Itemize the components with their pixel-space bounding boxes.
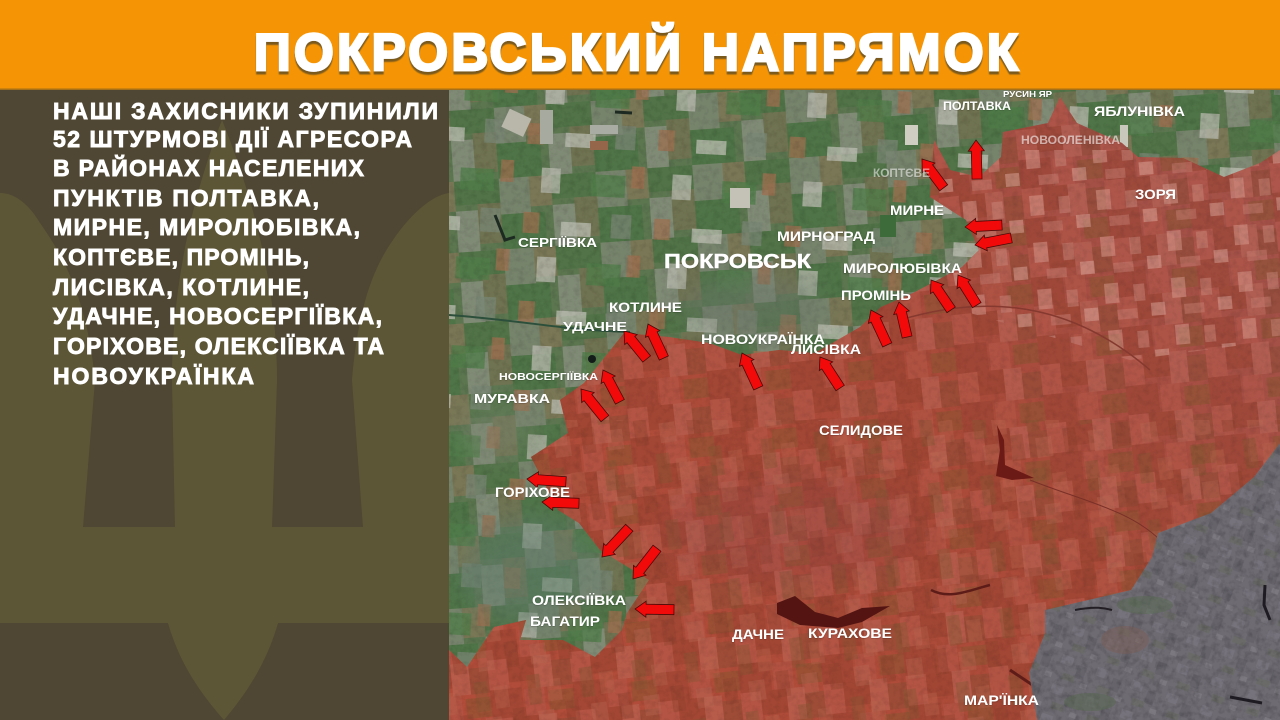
text block: summary of repelled assaults	[53, 98, 438, 389]
text block: summary of repelled assaults: МИРНЕ, МИРОЛЮБІВКА,	[53, 214, 360, 240]
arrow: Myrne south	[974, 232, 1013, 252]
arrow: Novoukrainka	[738, 352, 764, 390]
arrow: Oleksiivka	[635, 601, 674, 618]
map region: urban grey area	[1020, 430, 1280, 720]
label: Oleksiivka: ОЛЕКСІЇВКА	[532, 592, 626, 608]
map feature: Kurakhove reservoir	[777, 596, 890, 628]
text block: summary of repelled assaults: В РАЙОНАХ НАСЕЛЕНИХ	[53, 154, 365, 181]
text block: summary of repelled assaults: ГОРІХОВЕ, ОЛЕКСІЇВКА ТА	[53, 333, 384, 359]
panel: satellite map	[449, 89, 1280, 720]
text block: summary of repelled assaults: 52 ШТУРМОВІ ДІЇ АГРЕСОРА	[53, 126, 412, 152]
label: Bahatyr: БАГАТИР	[530, 613, 600, 629]
title: ПОКРОВСЬКИЙ НАПРЯМОК	[254, 23, 1019, 81]
label: Dachne: ДАЧНЕ	[732, 626, 784, 642]
arrow: Promin east	[893, 302, 912, 338]
arrow: north of Oleksiivka	[632, 544, 662, 580]
label: Myrnohrad: МИРНОГРАД	[777, 228, 875, 244]
label: Kotlyne: КОТЛИНЕ	[609, 299, 682, 315]
label: Horikhove: ГОРІХОВЕ	[495, 484, 570, 500]
label: Yablunivka: ЯБЛУНІВКА	[1094, 103, 1185, 119]
arrow: Myroliubivka west	[930, 279, 956, 314]
label: Selydove: СЕЛИДОВЕ	[819, 422, 903, 438]
arrow: Myroliubivka east	[956, 274, 982, 308]
label: Myrne: МИРНЕ	[890, 202, 944, 218]
text block: summary of repelled assaults: НОВОУКРАЇНКА	[53, 363, 254, 389]
arrow: Kotlyne	[644, 324, 669, 360]
map region: occupied territory in red	[449, 90, 1280, 720]
label: Udachne: УДАЧНЕ	[563, 319, 627, 334]
arrow: Lysivka	[818, 356, 845, 392]
panel: orange title bar	[0, 0, 1280, 90]
label: Marinka: МАР'ЇНКА	[964, 692, 1039, 708]
label: Lysivka: ЛИСІВКА	[791, 341, 861, 357]
arrow: Poltavka	[968, 140, 985, 179]
text block: summary of repelled assaults: ПУНКТІВ ПОЛТАВКА,	[53, 185, 319, 211]
label: Pokrovsk: ПОКРОВСЬК	[664, 251, 812, 273]
label: Kurakhove: КУРАХОВЕ	[808, 625, 892, 641]
label: Zoria: ЗОРЯ	[1135, 186, 1176, 202]
arrow: Horikhove north	[526, 471, 566, 490]
arrow: Horikhove south	[542, 494, 579, 511]
arrow: south of Horikhove	[602, 524, 634, 558]
arrow: Novoserhiivka west	[580, 388, 610, 422]
label: Koptieve: КОПТЄВЕ	[873, 166, 930, 180]
label: Novoukrainka: НОВОУКРАЇНКА	[701, 331, 825, 347]
map region: unoccupied farmland	[449, 90, 1280, 720]
label: Rusyn Yar: РУСИН ЯР	[1003, 89, 1052, 99]
arrow: Myrne north	[965, 217, 1002, 235]
text block: summary of repelled assaults: УДАЧНЕ, НОВОСЕРГІЇВКА,	[53, 303, 382, 329]
label: Serhiivka: СЕРГІЇВКА	[518, 235, 598, 250]
text block: summary of repelled assaults: КОПТЄВЕ, ПРОМІНЬ,	[53, 244, 309, 270]
label: Novoserhiivka: НОВОСЕРГІЇВКА	[499, 370, 598, 383]
arrow: Koptieve	[922, 158, 948, 192]
label: Myroliubivka: МИРОЛЮБІВКА	[843, 260, 962, 276]
icon: trident emblem	[0, 120, 449, 720]
label: Poltavka: ПОЛТАВКА	[943, 99, 1011, 113]
arrow: Promin west	[868, 310, 892, 348]
label: Promin: ПРОМІНЬ	[841, 287, 911, 303]
label: Novoolenivka: НОВООЛЕНІВКА	[1021, 133, 1120, 147]
arrow: Udachne	[624, 331, 651, 362]
text block: summary of repelled assaults: ЛИСІВКА, КОТЛИНЕ,	[53, 274, 309, 300]
text block: summary of repelled assaults: НАШІ ЗАХИСНИКИ ЗУПИНИЛИ	[53, 98, 438, 124]
label: Muravka: МУРАВКА	[474, 391, 551, 406]
arrows: enemy assault directions	[526, 140, 1013, 618]
place labels	[474, 89, 1185, 708]
panel: left text background with trident	[0, 90, 449, 720]
arrow: Novoserhiivka east	[600, 370, 625, 404]
